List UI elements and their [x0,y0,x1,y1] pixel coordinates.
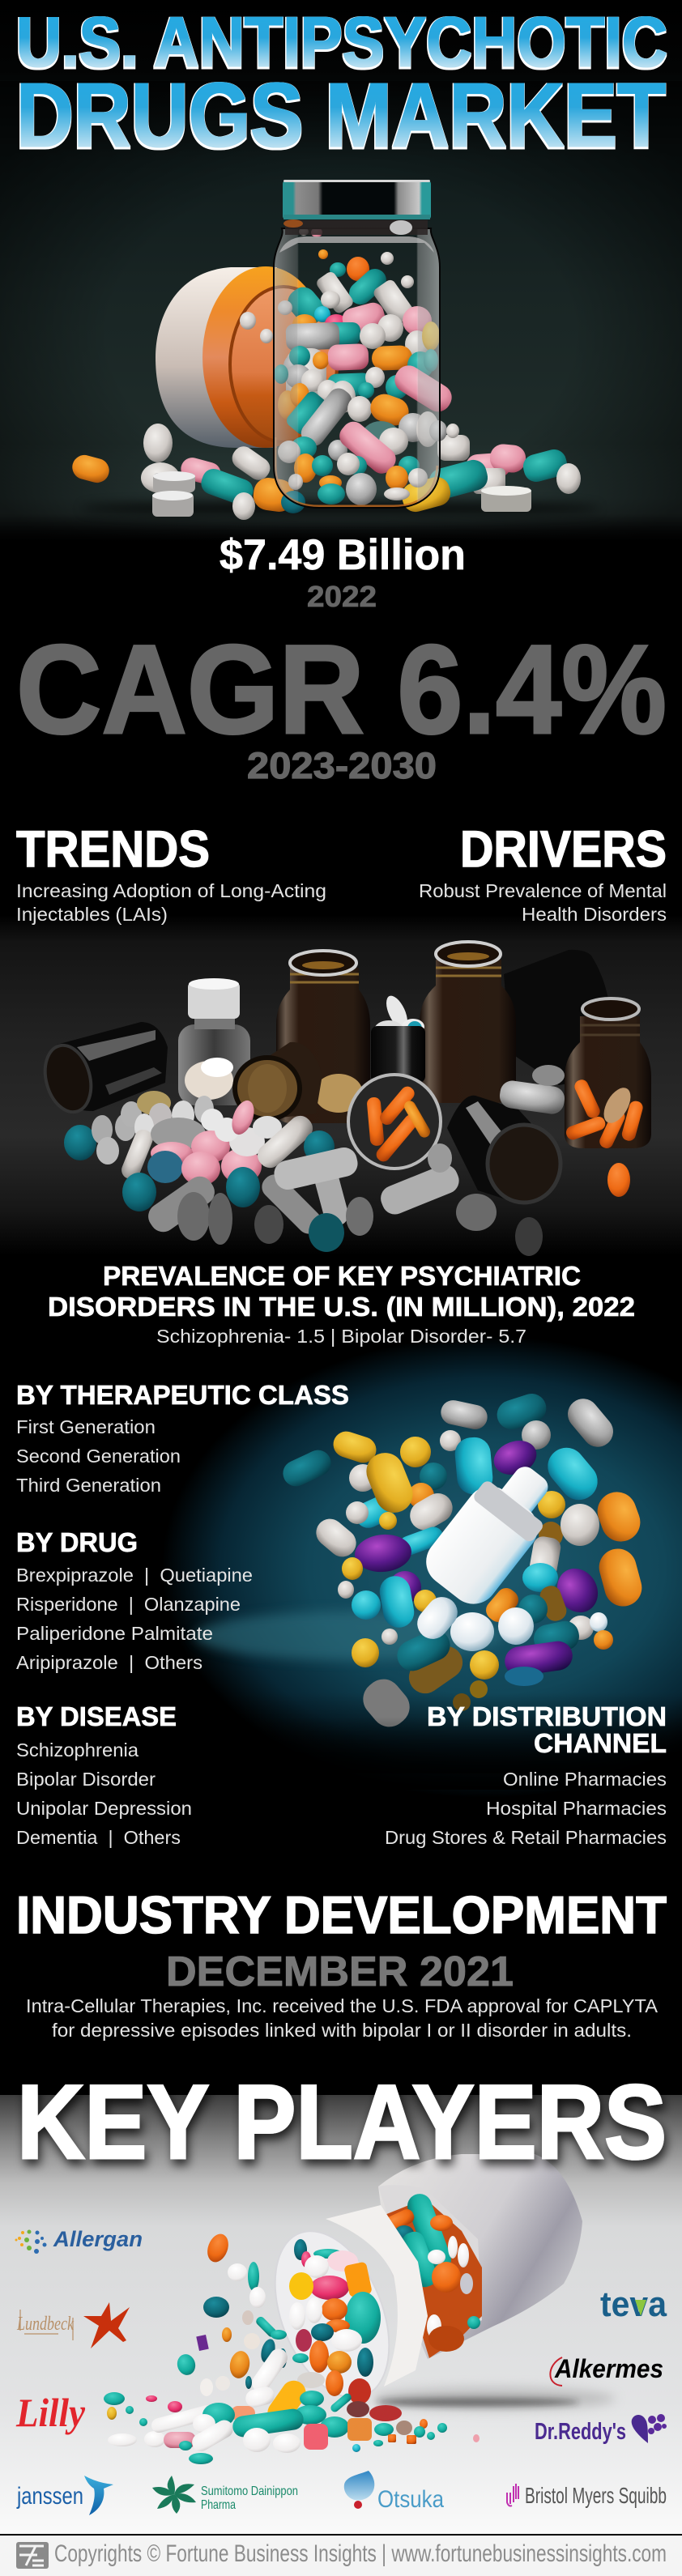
logo: Janssen: janssen [16,2483,83,2510]
icon: amber bottle behind left [276,951,370,1123]
text block: by distribution channel [385,1701,667,1848]
market value stat: $7.49 Billion [220,531,466,579]
icon: black lid and glass with orange capsules [348,1026,441,1169]
text block: industry development: for depressive episodes linked with bipolar I or II disorder in adults. [52,2020,632,2041]
icon: loose pills on the floor [70,424,581,520]
market value stat [220,531,466,613]
icon: white bottle [416,1450,569,1614]
logo: Lundbeck [16,2302,130,2348]
icon: clear bottle with white cap [178,978,250,1105]
text block: by drug [16,1527,253,1673]
CAGR stat: 2023-2030 [247,745,437,786]
icon: pills behind bottle [279,1390,646,1734]
heading: prevalence of key psychiatric disorders: Schizophrenia- 1.5 | Bipolar Disorder- 5.7 [156,1326,526,1347]
logo: Otsuka: Otsuka [377,2486,444,2513]
text block: by disease: BY DISEASE [16,1701,177,1731]
text block: by distribution channel: Hospital Pharmacies [486,1798,667,1819]
text block: by drug: Risperidone | Olanzapine [16,1594,241,1615]
text block: by distribution channel: Online Pharmacies [503,1769,667,1790]
text block: by therapeutic class: BY THERAPEUTIC CLASS [16,1380,349,1410]
text block: by disease: Schizophrenia [16,1739,139,1761]
text block: drivers: Health Disorders [522,904,667,925]
panel: bottles and pills image [0,915,682,1256]
logo: Allergan: Allergan [53,2227,143,2251]
icon: amber bottle behind right [420,942,516,1103]
heading: prevalence of key psychiatric disorders: PREVALENCE OF KEY PSYCHIATRIC [103,1261,581,1291]
logo: Janssen [16,2476,113,2515]
text block: drivers: DRIVERS [460,821,667,878]
text block: industry development [16,1885,667,2041]
logo: Lilly: Lilly [15,2390,86,2435]
icon: bottle shadow [373,2387,616,2410]
text block: drivers [419,821,667,925]
icon: jar lid [283,180,431,219]
footer [0,2534,682,2576]
logo: Sumitomo Dainippon Pharma: Sumitomo Dainippon [201,2484,298,2498]
text block: by therapeutic class: First Generation [16,1416,156,1437]
logo: Teva: teva [600,2284,667,2324]
icon: white pills behind the lid [374,993,424,1040]
icon: orange bottle cap behind jar [156,266,337,448]
icon: pills seen through the mouth [289,2239,381,2404]
text block: by drug: Aripiprazole | Others [16,1652,202,1673]
text block: drivers: Robust Prevalence of Mental [419,880,667,901]
text block: by therapeutic class: Third Generation [16,1475,161,1496]
logo: Sumitomo Dainippon Pharma [152,2476,298,2514]
logo: Lundbeck: Lundbeck [16,2314,74,2335]
icon: Fortune Business Insights logo [16,2542,49,2569]
text block: trends: Injectables (LAIs) [16,904,168,925]
panel: floating pills image [162,1336,682,1798]
logo: Sumitomo Dainippon Pharma: Pharma [201,2498,236,2512]
text block: trends: Increasing Adoption of Long-Acting [16,880,326,901]
icon: tilted amber bottle [235,1042,322,1119]
icon: scattered pills [64,1091,543,1256]
text block: industry development: INDUSTRY DEVELOPMENT [16,1885,667,1944]
heading: prevalence of key psychiatric disorders [48,1261,635,1347]
icon: pills inside the bottle [381,2191,482,2358]
icon: amber gel drop [607,1163,630,1197]
text block: by distribution channel: CHANNEL [534,1728,667,1758]
market value stat: 2022 [307,580,377,613]
text block: trends: TRENDS [16,821,210,878]
title [16,2,667,166]
logo: Dr. Reddy's: Dr.Reddy's [535,2419,626,2445]
icon: pills in front of bottle [411,1590,534,1646]
text block: industry development: Intra-Cellular Therapies, Inc. received the U.S. FDA approval for CAPLYTA [26,1995,659,2016]
icon: white capsule and disc behind right [498,1065,566,1115]
text block: by drug: BY DRUG [16,1527,138,1557]
text block: by drug: Brexpiprazole | Quetiapine [16,1565,253,1586]
icon: black lying bottle [38,1022,168,1118]
text block: by distribution channel: BY DISTRIBUTION [427,1701,667,1731]
icon: neck ring [326,2205,428,2387]
heading: prevalence of key psychiatric disorders: DISORDERS IN THE U.S. (IN MILLION), 2022 [48,1292,635,1322]
icon: black lying bottle right [447,1096,561,1203]
logo: Alkermes: Alkermes [554,2354,663,2383]
text block: by therapeutic class: Second Generation [16,1446,181,1467]
text block: by disease [16,1701,192,1848]
icon: glass jar full of pills [274,219,459,508]
text block: by disease: Bipolar Disorder [16,1769,156,1790]
text block: by distribution channel: Drug Stores & Retail Pharmacies [385,1827,667,1848]
icon: amber bottle right with orange pills [565,998,651,1151]
text block: by disease: Dementia | Others [16,1827,181,1848]
logo: Allergan [15,2227,143,2254]
text block: by therapeutic class [16,1380,349,1496]
panel: key players [0,2095,682,2534]
icon: big black bottle back right [504,950,611,1085]
panel: hero bottle image [0,0,682,541]
logo: Otsuka [344,2471,444,2513]
icon: tipped white bottle [253,2154,582,2414]
text block: by drug: Paliperidone Palmitate [16,1623,213,1644]
text block: trends [16,821,326,925]
icon: spilled pills [104,2231,480,2464]
text block: industry development: DECEMBER 2021 [166,1948,514,1995]
text block: by disease: Unipolar Depression [16,1798,192,1819]
